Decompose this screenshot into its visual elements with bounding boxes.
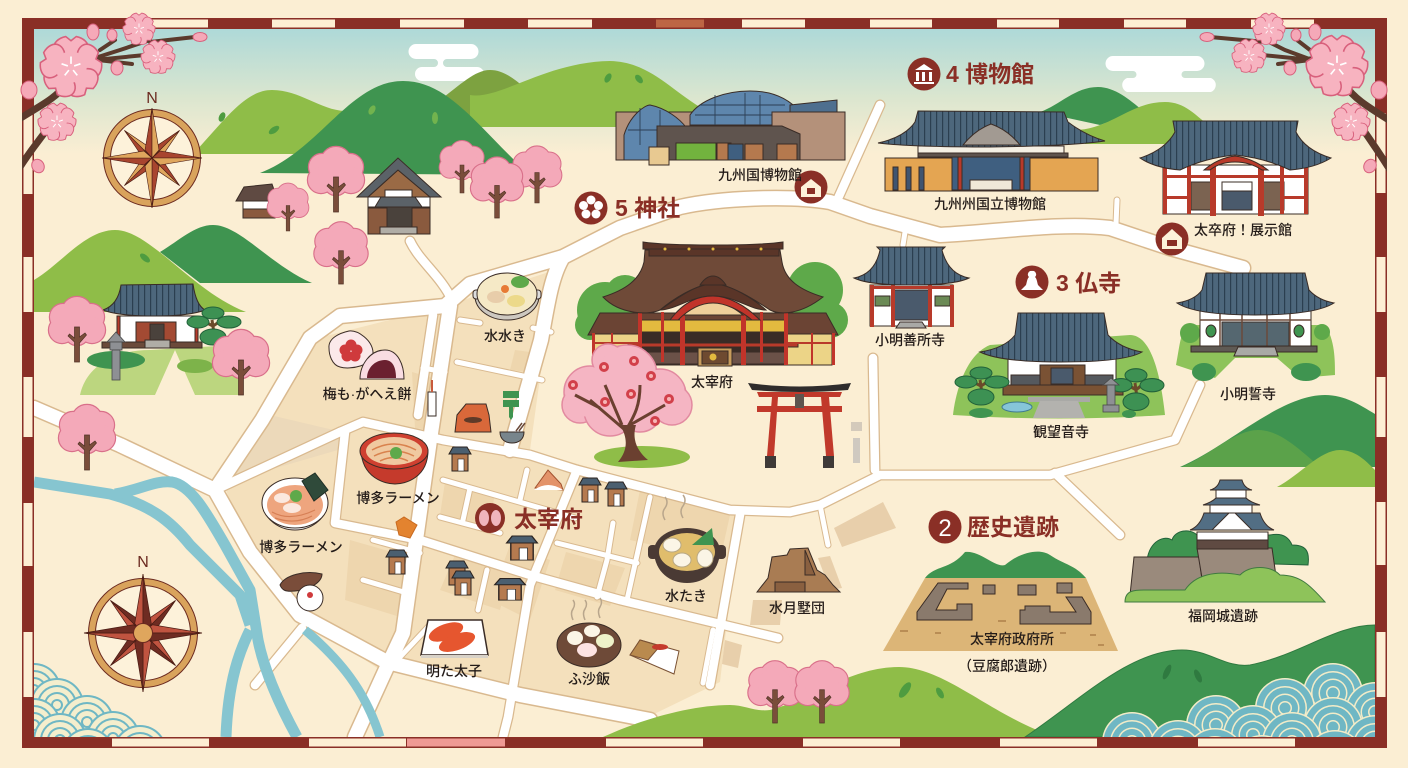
hills: right range xyxy=(1180,395,1375,487)
clouds xyxy=(409,44,1216,92)
food: manju pair xyxy=(280,573,323,611)
wave pattern bottom left xyxy=(34,663,162,737)
heading: 2 historic sites: 2 xyxy=(938,515,952,542)
food: mentaiko xyxy=(421,618,488,658)
food: bread slice xyxy=(630,640,679,674)
food: white ramen bowl xyxy=(262,473,328,530)
label: dumpling plate: ふ沙飯 xyxy=(568,671,610,687)
national museum building xyxy=(878,111,1105,191)
label: exhibition hall: 太卒府！展示館 xyxy=(1194,222,1292,238)
label: Kanzeonji: 観望音寺 xyxy=(1033,424,1089,440)
heading: 2 historic sites xyxy=(928,510,1059,544)
Mizuki mound xyxy=(757,548,840,592)
label: ramen left: 博多ラーメン xyxy=(259,539,343,555)
small temple xyxy=(854,247,969,328)
Fukuoka castle xyxy=(1125,480,1325,602)
heading: 4 museums: 4 博物館 xyxy=(946,61,1034,87)
river xyxy=(34,482,380,737)
Kanzeonji temple xyxy=(953,313,1165,418)
label: site subtitle: （豆腐郎遺跡） xyxy=(958,658,1056,674)
label: mentaiko: 明た太子 xyxy=(426,663,482,679)
heading: Dazaifu town xyxy=(475,503,583,533)
label: hot pot: 水水き xyxy=(484,328,526,344)
heading: 3 temples xyxy=(1016,266,1121,298)
wave pattern bottom right xyxy=(1102,663,1375,737)
small market items xyxy=(428,380,525,443)
main shrine xyxy=(575,242,848,366)
cherry branch top right xyxy=(1200,13,1400,178)
label: Dazaifu shrine: 太宰府 xyxy=(691,374,733,390)
heading: 3 temples: 3 仏寺 xyxy=(1056,270,1121,296)
label: ramen center: 博多ラーメン xyxy=(356,490,440,506)
heading: 5 shrines xyxy=(574,192,680,224)
heading: 5 shrines: 5 神社 xyxy=(615,195,680,221)
food: dumpling plate xyxy=(557,598,621,667)
label: small temple: 小明善所寺 xyxy=(875,332,945,348)
heading: Dazaifu town: 太宰府 xyxy=(514,506,583,532)
food: mizutaki pot xyxy=(648,495,726,583)
cherry branch top left xyxy=(10,13,207,175)
compass bottom left: N xyxy=(137,554,149,571)
compass top left xyxy=(102,90,202,208)
label: national museum: 九州州国立博物館 xyxy=(934,196,1046,212)
government office site xyxy=(883,552,1118,651)
food: hot pot top xyxy=(473,273,541,320)
plum tree xyxy=(562,344,692,468)
compass bottom left xyxy=(84,554,202,692)
town houses xyxy=(386,447,627,600)
Komyo temple xyxy=(1176,273,1335,381)
heading: 4 museums xyxy=(908,58,1034,90)
label: Kyushu museum: 九州国博物館 xyxy=(718,167,802,183)
town ground xyxy=(225,270,896,716)
hills: leaves xyxy=(138,72,645,264)
bottom hills xyxy=(603,625,1375,737)
food: plum mochi xyxy=(329,331,404,379)
label: plum mochi: 梅も·がへえ餅 xyxy=(323,386,411,402)
museum pin xyxy=(794,170,828,204)
item: orange cloth xyxy=(396,517,417,538)
label: mizutaki: 水たき xyxy=(665,588,707,604)
heading: 2 historic sites: 歴史遺跡 xyxy=(967,514,1059,540)
cherry trees xyxy=(49,141,849,723)
label: Fukuoka castle: 福岡城遺跡 xyxy=(1188,608,1258,624)
temple left with garden xyxy=(80,284,241,395)
exhibition hall xyxy=(1140,121,1331,216)
exhibition pin xyxy=(1156,222,1188,256)
food: red ramen bowl xyxy=(360,433,428,484)
label: Komyo temple: 小明誓寺 xyxy=(1220,386,1276,402)
label: Mizuki: 水月墅団 xyxy=(769,600,825,616)
small house upper left xyxy=(236,184,278,218)
Kyushu museum building xyxy=(616,91,845,165)
hills: back range xyxy=(34,61,1212,312)
roads xyxy=(34,105,1243,737)
compass top left: N xyxy=(146,90,158,107)
farmhouse xyxy=(357,158,441,234)
torii gate xyxy=(748,383,862,468)
label: government office: 太宰府政府所 xyxy=(970,631,1054,647)
